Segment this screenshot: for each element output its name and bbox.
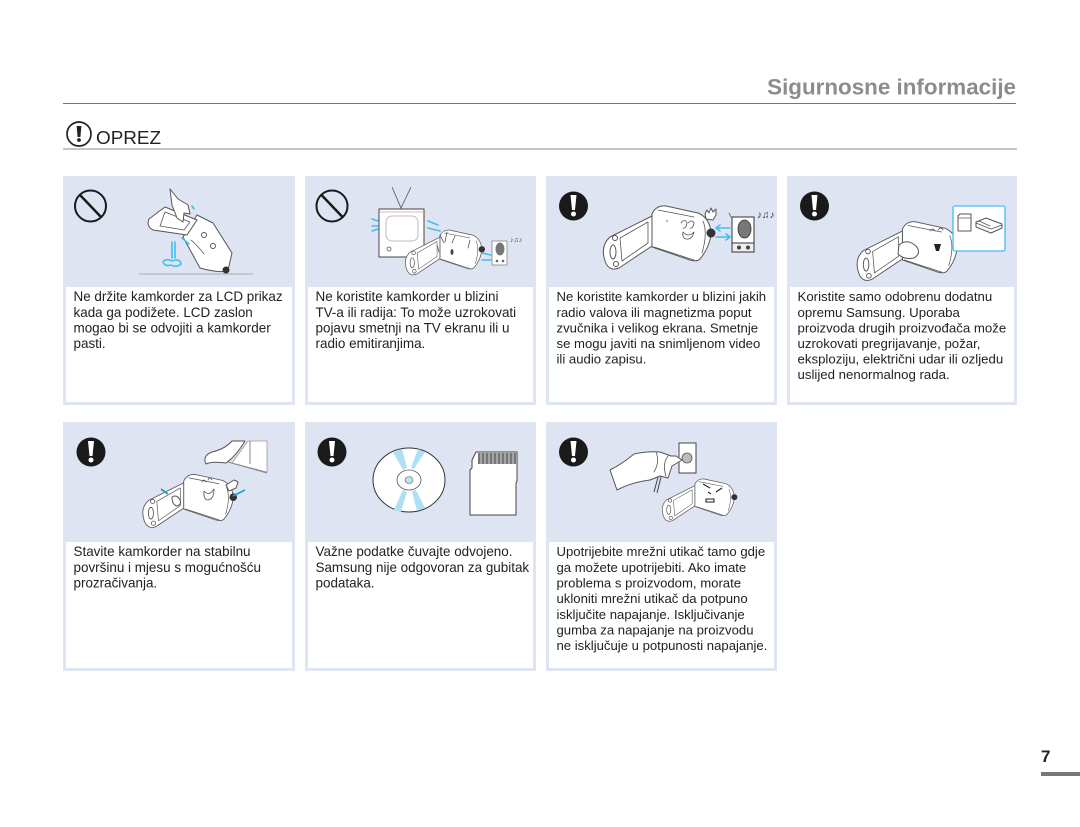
caption: ne isključuje u potpunosti napajanje.	[556, 638, 767, 653]
icon: caution circle	[67, 122, 91, 146]
panel 7: power plug	[546, 422, 777, 670]
section heading: caution: OPREZ	[96, 128, 161, 149]
illustration: optical disc	[373, 448, 445, 512]
caption: površinu i mjesu s mogućnošću	[74, 560, 261, 575]
icon: warning	[76, 438, 106, 466]
caption: pasti.	[74, 336, 106, 351]
illustration: camcorder and speaker	[603, 206, 774, 269]
illustration: camcorder and speaker: ♪♫♪	[757, 210, 774, 221]
illustration: camcorder with accessories	[857, 206, 1005, 280]
caption	[74, 289, 283, 351]
caption: Upotrijebite mrežni utikač tamo gdje	[556, 544, 765, 559]
caption: podataka.	[316, 576, 375, 590]
page number: 7	[1041, 747, 1050, 766]
icon: prohibited	[316, 190, 348, 222]
caption: kada ga podižete. LCD zaslon	[74, 305, 253, 320]
caption	[798, 289, 1006, 382]
caption: ili audio zapisu.	[556, 352, 646, 366]
illustration: SD memory card	[470, 452, 517, 515]
panel 1: do not hold by LCD	[63, 176, 295, 404]
panel 3: avoid speakers and magnetism	[546, 176, 777, 404]
caption: mogao bi se odvojiti a kamkorder	[74, 320, 271, 336]
icon: warning	[800, 192, 829, 220]
caption: Važne podatke čuvajte odvojeno.	[316, 544, 512, 559]
caption	[556, 289, 766, 366]
caption: Samsung nije odgovoran za gubitak	[316, 560, 529, 575]
caption: uzrokovati pregrijavanje, požar,	[798, 336, 980, 351]
caption: radio emitiranjima.	[316, 336, 425, 351]
icon: warning	[318, 438, 346, 466]
illustration: hand unplugging, angry camcorder	[610, 443, 737, 521]
caption: TV-a ili radija: To može uzrokovati	[316, 305, 516, 320]
caption: problema s proizvodom, morate	[556, 576, 741, 590]
icon: warning	[559, 192, 588, 220]
caption: Ne koristite kamkorder u blizini jakih	[556, 289, 766, 304]
caption	[316, 289, 516, 351]
caption: Ne držite kamkorder za LCD prikaz	[74, 289, 283, 304]
caption: ga možete upotrijebiti. Ako imate	[556, 560, 746, 575]
panel 4: approved accessories only	[787, 176, 1017, 404]
illustration: camcorder by window	[143, 441, 267, 527]
caption: proizvoda drugih proizvođača može	[798, 320, 1006, 336]
icon: prohibited	[75, 190, 106, 222]
panel 2: avoid TV and radio	[305, 176, 536, 404]
caption: prozračivanja.	[74, 576, 157, 590]
caption: gumba za napajanje na proizvodu	[556, 622, 754, 638]
illustration: TV, camcorder, speaker	[372, 187, 522, 275]
caption: pojavu smetnji na TV ekranu ili u	[316, 320, 509, 336]
caption	[316, 544, 529, 590]
caption: radio valova ili magnetizma poput	[556, 305, 752, 320]
caption: eksploziju, električni udar ili ozljedu	[798, 352, 1003, 366]
caption: zvučnika i velikog ekrana. Smetnje	[556, 320, 758, 336]
section heading: caution	[67, 122, 161, 149]
illustration: camcorder falling	[139, 189, 253, 274]
icon: warning	[559, 438, 588, 466]
panel 5: stable ventilated surface	[63, 422, 295, 670]
caption: isključite napajanje. Isključivanje	[556, 607, 745, 622]
panel 6: back up data	[305, 422, 536, 670]
illustration: TV, camcorder, speaker: ♪♫♪	[510, 237, 522, 244]
caption: opremu Samsung. Uporaba	[798, 305, 961, 320]
caption: uslijed nenormalnog rada.	[798, 367, 950, 382]
caption: se mogu javiti na snimljenom video	[556, 336, 760, 351]
caption: Koristite samo odobrenu dodatnu	[798, 289, 992, 304]
caption: ukloniti mrežni utikač da potpuno	[556, 591, 748, 606]
caption	[556, 544, 767, 653]
caption	[74, 544, 261, 590]
page title: Sigurnosne informacije	[767, 74, 1016, 100]
caption: Ne koristite kamkorder u blizini	[316, 289, 498, 304]
caption: Stavite kamkorder na stabilnu	[74, 544, 251, 559]
